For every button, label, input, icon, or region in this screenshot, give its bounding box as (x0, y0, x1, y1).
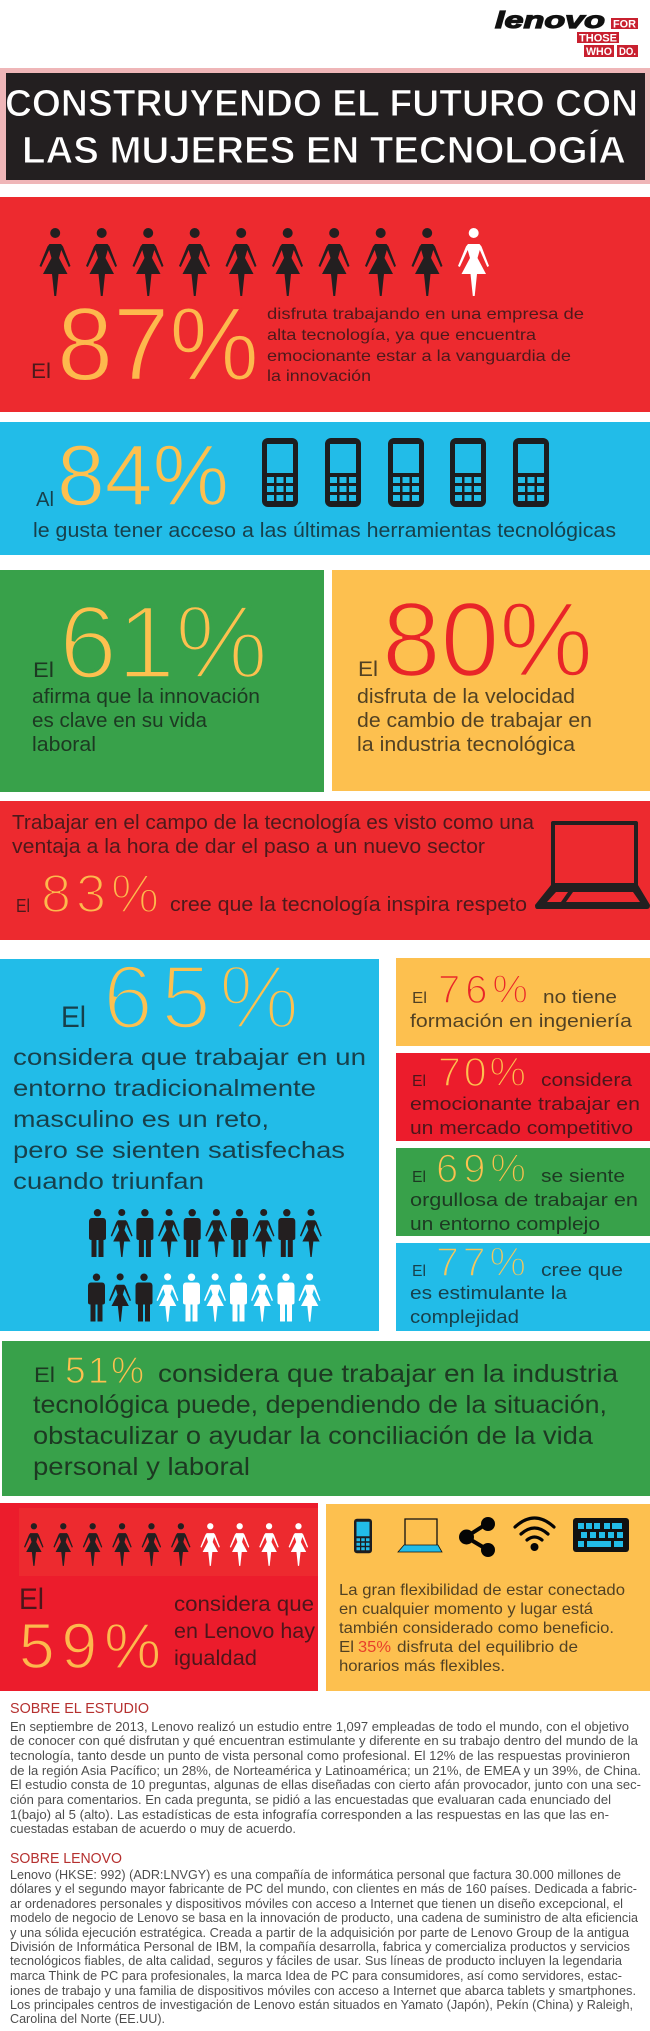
body text: lenovo: marca Think de PC para profesionales, la marca Idea de PC para consumidores, así como servidores, estac- (10, 1969, 622, 1983)
title banner (0, 68, 650, 184)
description: laboral (32, 734, 96, 756)
panel: 70%: un mercado competitivo (410, 1118, 633, 1138)
stat: 83%: 83% (41, 864, 159, 924)
panel: 65% (0, 948, 379, 1331)
panel: 77% (396, 1239, 650, 1331)
panel: 77%: cree que (541, 1260, 623, 1280)
body text: estudio: de conocer con qué disfrutan y qué encuentran estimulante y diferente en su trabajo dentro del mundo de la (10, 1734, 638, 1748)
panel: 59% (0, 1503, 318, 1691)
icon: keyboard (573, 1518, 629, 1552)
description (267, 306, 584, 385)
stat: 61%: 61% (59, 585, 268, 701)
description (357, 686, 592, 756)
body text: estudio: 1(bajo) al 5 (alto). Las estadísticas de esta infografía corresponden a las respuestas en las que las en- (10, 1808, 609, 1822)
stat: 83%: cree que la tecnología inspira respeto (170, 894, 527, 916)
icon: share (459, 1517, 495, 1557)
icon: laptop (535, 821, 650, 909)
description: pero se sienten satisfechas (13, 1137, 345, 1163)
section: sobre el estudio: SOBRE EL ESTUDIO (10, 1700, 149, 1717)
body text: lenovo: dólares y el segundo mayor fabricante de PC del mundo, con clientes en más de 160 países. Dedicada a fabric- (10, 1882, 637, 1896)
panel: 77%: 77% (436, 1239, 526, 1285)
panel: 69% (396, 1147, 650, 1236)
description (32, 686, 260, 756)
icon row: women 9 of 10 (40, 228, 489, 296)
description: también considerado como beneficio. (339, 1620, 614, 1637)
stat: 59%: 59% (19, 1610, 161, 1682)
body text: estudio (10, 1720, 641, 1836)
stat: 65%: El (61, 1001, 86, 1034)
panel: 80% (332, 570, 650, 791)
title banner: CONSTRUYENDO EL FUTURO CON (5, 83, 638, 125)
description (339, 1582, 625, 1675)
description: 35% (358, 1639, 391, 1656)
icon: wifi (515, 1518, 554, 1551)
panel: 51% (2, 1341, 650, 1496)
section: sobre lenovo: SOBRE LENOVO (10, 1850, 122, 1867)
panel: 69%: 69% (436, 1147, 526, 1191)
lenovo logo (495, 7, 638, 58)
description: horarios más flexibles. (339, 1658, 505, 1675)
body text: lenovo: Carolina del Norte (EE.UU). (10, 2012, 165, 2026)
icon: phone (354, 1519, 372, 1553)
panel: 69%: se siente (541, 1166, 625, 1186)
stat: 84%: 84% (57, 428, 229, 524)
panel: 76% (396, 958, 650, 1046)
description (174, 1593, 315, 1670)
description: la innovación (267, 368, 371, 385)
panel: 83% (0, 801, 650, 940)
section: sobre lenovo (10, 1850, 638, 2026)
stat: 87%: 87% (57, 287, 259, 403)
panel: 51%: personal y laboral (33, 1453, 250, 1481)
lenovo logo: DO. (619, 46, 636, 58)
description: considera que trabajar en un (13, 1044, 366, 1070)
panel: 76%: no tiene (543, 987, 617, 1007)
body text: estudio: En septiembre de 2013, Lenovo realizó un estudio entre 1,097 empleadas de todo el mundo, con el objetivo (10, 1720, 629, 1734)
body text: lenovo: y una sólida ejecución estratégica. Creada a partir de la adquisición por parte de Lenovo Group de la antigua (10, 1926, 629, 1940)
body text: lenovo: Los principales centros de investigación de Lenovo están situados en Yamato (Japón), Pekín (China) y Raleigh, (10, 1998, 633, 2012)
body text: lenovo: ar ordenadores personales y dispositivos móviles con acceso a Internet que tienen un diseño excepcional, el (10, 1897, 623, 1911)
body text: estudio: de la región Asia Pacífico; un 28%, de Norteamérica y Latinoamérica; un 21%, de EMEA y un 39%, de China. (10, 1764, 641, 1778)
stat: 84%: Al (36, 489, 54, 511)
panel: 70% (396, 1049, 650, 1141)
body text: estudio: cuestadas estaban de acuerdo o muy de acuerdo. (10, 1822, 296, 1836)
description: de cambio de trabajar en (357, 710, 592, 732)
panel: 70%: emocionante trabajar en (410, 1094, 640, 1114)
lenovo logo: THOSE (579, 32, 617, 44)
body text: lenovo: modelo de negocio de Lenovo se basa en la innovación de producto, una cadena de suministro de alta eficiencia (10, 1911, 638, 1925)
panel: 51%: obstaculizar o ayudar la conciliación de la vida (33, 1422, 593, 1450)
description: le gusta tener acceso a las últimas herramientas tecnológicas (33, 520, 616, 542)
panel: flexibility (326, 1504, 650, 1691)
description: afirma que la innovación (32, 686, 260, 708)
panel: 70%: considera (541, 1070, 633, 1090)
description: masculino es un reto, (13, 1106, 269, 1132)
stat: 87%: El (31, 360, 51, 383)
description (13, 1044, 366, 1194)
stat: 80%: 80% (382, 581, 593, 699)
description: la industria tecnológica (357, 734, 576, 756)
panel: 84% (0, 422, 650, 555)
description: entorno tradicionalmente (13, 1075, 316, 1101)
body text: lenovo (10, 1868, 638, 2026)
icon: laptop (398, 1519, 442, 1552)
text: intro: ventaja a la hora de dar el paso a un nuevo sector (12, 836, 485, 858)
stat: 83%: El (16, 896, 30, 916)
body text: lenovo: Lenovo (HKSE: 992) (ADR:LNVGY) es una compañía de informática personal que factura 30.000 millones de (10, 1868, 621, 1882)
stat: 80%: El (358, 658, 378, 681)
description: El (339, 1639, 354, 1656)
panel: 61% (0, 570, 324, 792)
lenovo logo: lenovo (495, 7, 605, 33)
title banner: LAS MUJERES EN TECNOLOGÍA (22, 128, 626, 172)
description: La gran flexibilidad de estar conectado (339, 1582, 625, 1599)
lenovo logo: WHO (586, 46, 612, 58)
stat: 59%: El (19, 1583, 44, 1616)
text: intro (12, 812, 535, 858)
body text: lenovo: iones de trabajo y una familia de dispositivos móviles con acceso a Internet que abarca tablets y smartphones. (10, 1984, 636, 1998)
panel: 77%: El (412, 1263, 426, 1280)
body text: lenovo: División de Informática Personal de IBM, la compañía desarrolla, fabrica y comercializa productos y servicios (10, 1940, 630, 1954)
text: intro: Trabajar en el campo de la tecnología es visto como una (12, 812, 535, 834)
stat: 83% (16, 864, 527, 924)
description: disfruta de la velocidad (357, 686, 575, 708)
icon row: women 6 of 10 (24, 1523, 308, 1566)
panel: 77%: complejidad (410, 1307, 519, 1327)
panel: 51%: El (34, 1364, 55, 1387)
description: en Lenovo hay (174, 1620, 315, 1643)
description: disfruta del equilibrio de (397, 1639, 578, 1656)
panel: 76%: El (412, 990, 427, 1007)
description: cuando triunfan (13, 1168, 204, 1194)
panel: 69%: un entorno complejo (410, 1214, 600, 1234)
description: en cualquier momento y lugar está (339, 1601, 593, 1618)
body text: estudio: tecnología, tanto desde un punto de vista personal como profesional. El 12% de las respuestas provinieron (10, 1749, 630, 1763)
description: considera que (174, 1593, 314, 1616)
icon rows: men and women (88, 1209, 322, 1322)
panel: 69%: El (412, 1169, 426, 1186)
panel: 51%: considera que trabajar en la industria (158, 1360, 618, 1388)
section: sobre el estudio (10, 1700, 641, 1836)
stat: 61%: El (33, 659, 54, 682)
description: igualdad (174, 1647, 257, 1670)
stat: 65%: 65% (103, 948, 299, 1048)
body text: lenovo: tecnológicos fiables, de alta calidad, seguros y fáciles de usar. Sus líneas de producto incluyen la legendaria (10, 1954, 622, 1968)
description: alta tecnología, ya que encuentra (267, 327, 536, 344)
body text: estudio: El estudio consta de 10 preguntas, algunas de ellas diseñadas con cierto afán provocador, junto con una sec- (10, 1778, 641, 1792)
panel: 69%: orgullosa de trabajar en (410, 1190, 638, 1210)
panel: 87% (0, 197, 650, 412)
panel: 76%: formación en ingeniería (410, 1011, 633, 1031)
panel: 70%: 70% (438, 1049, 526, 1095)
panel: 51%: 51% (65, 1350, 144, 1391)
description: disfruta trabajando en una empresa de (267, 306, 584, 323)
lenovo logo: FOR (613, 18, 636, 30)
panel: 77%: es estimulante la (410, 1283, 568, 1303)
body text: estudio: ción para comentarios. En cada pregunta, se pidió a las encuestadas que evaluaran cada enunciado del (10, 1793, 611, 1807)
description: es clave en su vida (32, 710, 208, 732)
panel: 51%: tecnológica puede, dependiendo de la situación, (33, 1391, 607, 1419)
panel: 70%: El (412, 1073, 426, 1090)
description: emocionante estar a la vanguardia de (267, 348, 571, 365)
panel: 76%: 76% (438, 968, 528, 1012)
icon row: phones (262, 438, 549, 507)
